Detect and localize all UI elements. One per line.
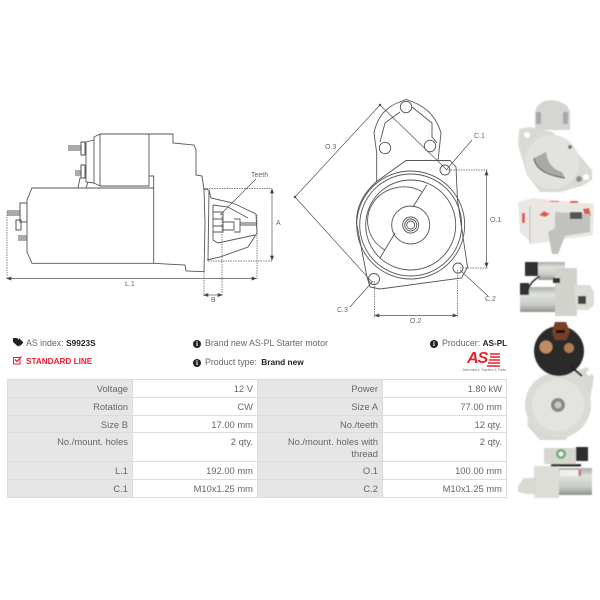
- drawing label: A: A: [276, 220, 281, 227]
- nose housing: [204, 189, 257, 260]
- specifications table: 2 qty.: [480, 436, 502, 447]
- info: product type: i: [196, 359, 198, 367]
- specifications table: Rotation: [93, 401, 128, 412]
- specifications table: M10x1.25 mm: [443, 483, 502, 494]
- specifications table: CW: [237, 401, 253, 412]
- specifications table: L.1: [115, 465, 128, 476]
- solenoid outline: [78, 134, 149, 188]
- dimension O.2: [374, 270, 458, 318]
- specifications table: 12 V: [234, 383, 253, 394]
- specifications table: C.2: [363, 483, 378, 494]
- specifications table: 100.00 mm: [455, 465, 502, 476]
- photo: starter rear with solenoid: [522, 322, 594, 440]
- drawing label: O.3: O.3: [325, 144, 336, 151]
- specifications table: Size B: [101, 419, 128, 430]
- photo: starter side 2: [518, 447, 592, 498]
- drive housing outline: [149, 134, 205, 272]
- drawing label: C.1: C.1: [474, 133, 485, 140]
- specifications table: 2 qty.: [231, 436, 253, 447]
- mounting holes: [440, 165, 450, 175]
- photo: starter side: [520, 262, 594, 316]
- dimension A: [204, 188, 274, 261]
- photo: product box: [518, 198, 594, 254]
- info: brand new description: Brand new AS-PL Starter motor: [205, 338, 328, 348]
- specifications table: No./mount. holes: [57, 436, 128, 447]
- info: standard line: STANDARD LINE: [26, 357, 92, 366]
- logo: AS-PL: [462, 350, 506, 372]
- main circles: [357, 171, 465, 279]
- logo: AS-PL: AS: [467, 350, 487, 367]
- info: producer: i: [433, 340, 435, 348]
- specifications table: 77.00 mm: [460, 401, 502, 412]
- drawing label: O.1: O.1: [490, 217, 501, 224]
- info: brand new description: i: [196, 340, 198, 348]
- drawing label: B: B: [211, 297, 216, 304]
- dimension O.3: [294, 104, 447, 282]
- specifications table: Size A: [351, 401, 378, 412]
- specifications table: [7, 379, 507, 498]
- specifications table: 192.00 mm: [206, 465, 253, 476]
- specifications table: Power: [351, 383, 378, 394]
- specifications table: No./teeth: [340, 419, 378, 430]
- terminal studs: [7, 142, 85, 240]
- flange plate: [356, 160, 468, 289]
- specifications table: 1.80 kW: [468, 383, 502, 394]
- specifications table: O.1: [363, 465, 378, 476]
- specifications table: M10x1.25 mm: [194, 483, 253, 494]
- specifications table: C.1: [113, 483, 128, 494]
- info: product type: Product type: Brand new: [205, 357, 304, 367]
- info: producer: Producer: AS-PL: [442, 338, 507, 348]
- logo: AS-PL: Alternators, Starters & Parts: [462, 368, 506, 372]
- drawing label: O.2: O.2: [410, 318, 421, 325]
- specifications table: 17.00 mm: [211, 419, 253, 430]
- leader lines: [350, 140, 488, 307]
- specifications table: 12 qty.: [475, 419, 502, 430]
- info: AS index: AS index: S9923S: [26, 338, 96, 348]
- specifications table: No./mount. holes with thread: [288, 436, 378, 458]
- front view technical drawing: [294, 100, 488, 318]
- drawing label: C.2: C.2: [485, 296, 496, 303]
- motor body outline: [27, 188, 154, 263]
- rear ear with holes: [374, 100, 441, 182]
- specifications table: Voltage: [97, 383, 128, 394]
- dimension B: [204, 214, 222, 296]
- dimension L1: [7, 212, 257, 280]
- teeth leader line: [220, 179, 256, 215]
- drawing label: C.3: C.3: [337, 307, 348, 314]
- drawing label: L.1: L.1: [125, 281, 135, 288]
- dimension O.1: [446, 170, 488, 268]
- pinion detail: [213, 205, 257, 243]
- drawing label: Teeth: Teeth: [251, 172, 268, 179]
- photo: starter front: [518, 100, 592, 192]
